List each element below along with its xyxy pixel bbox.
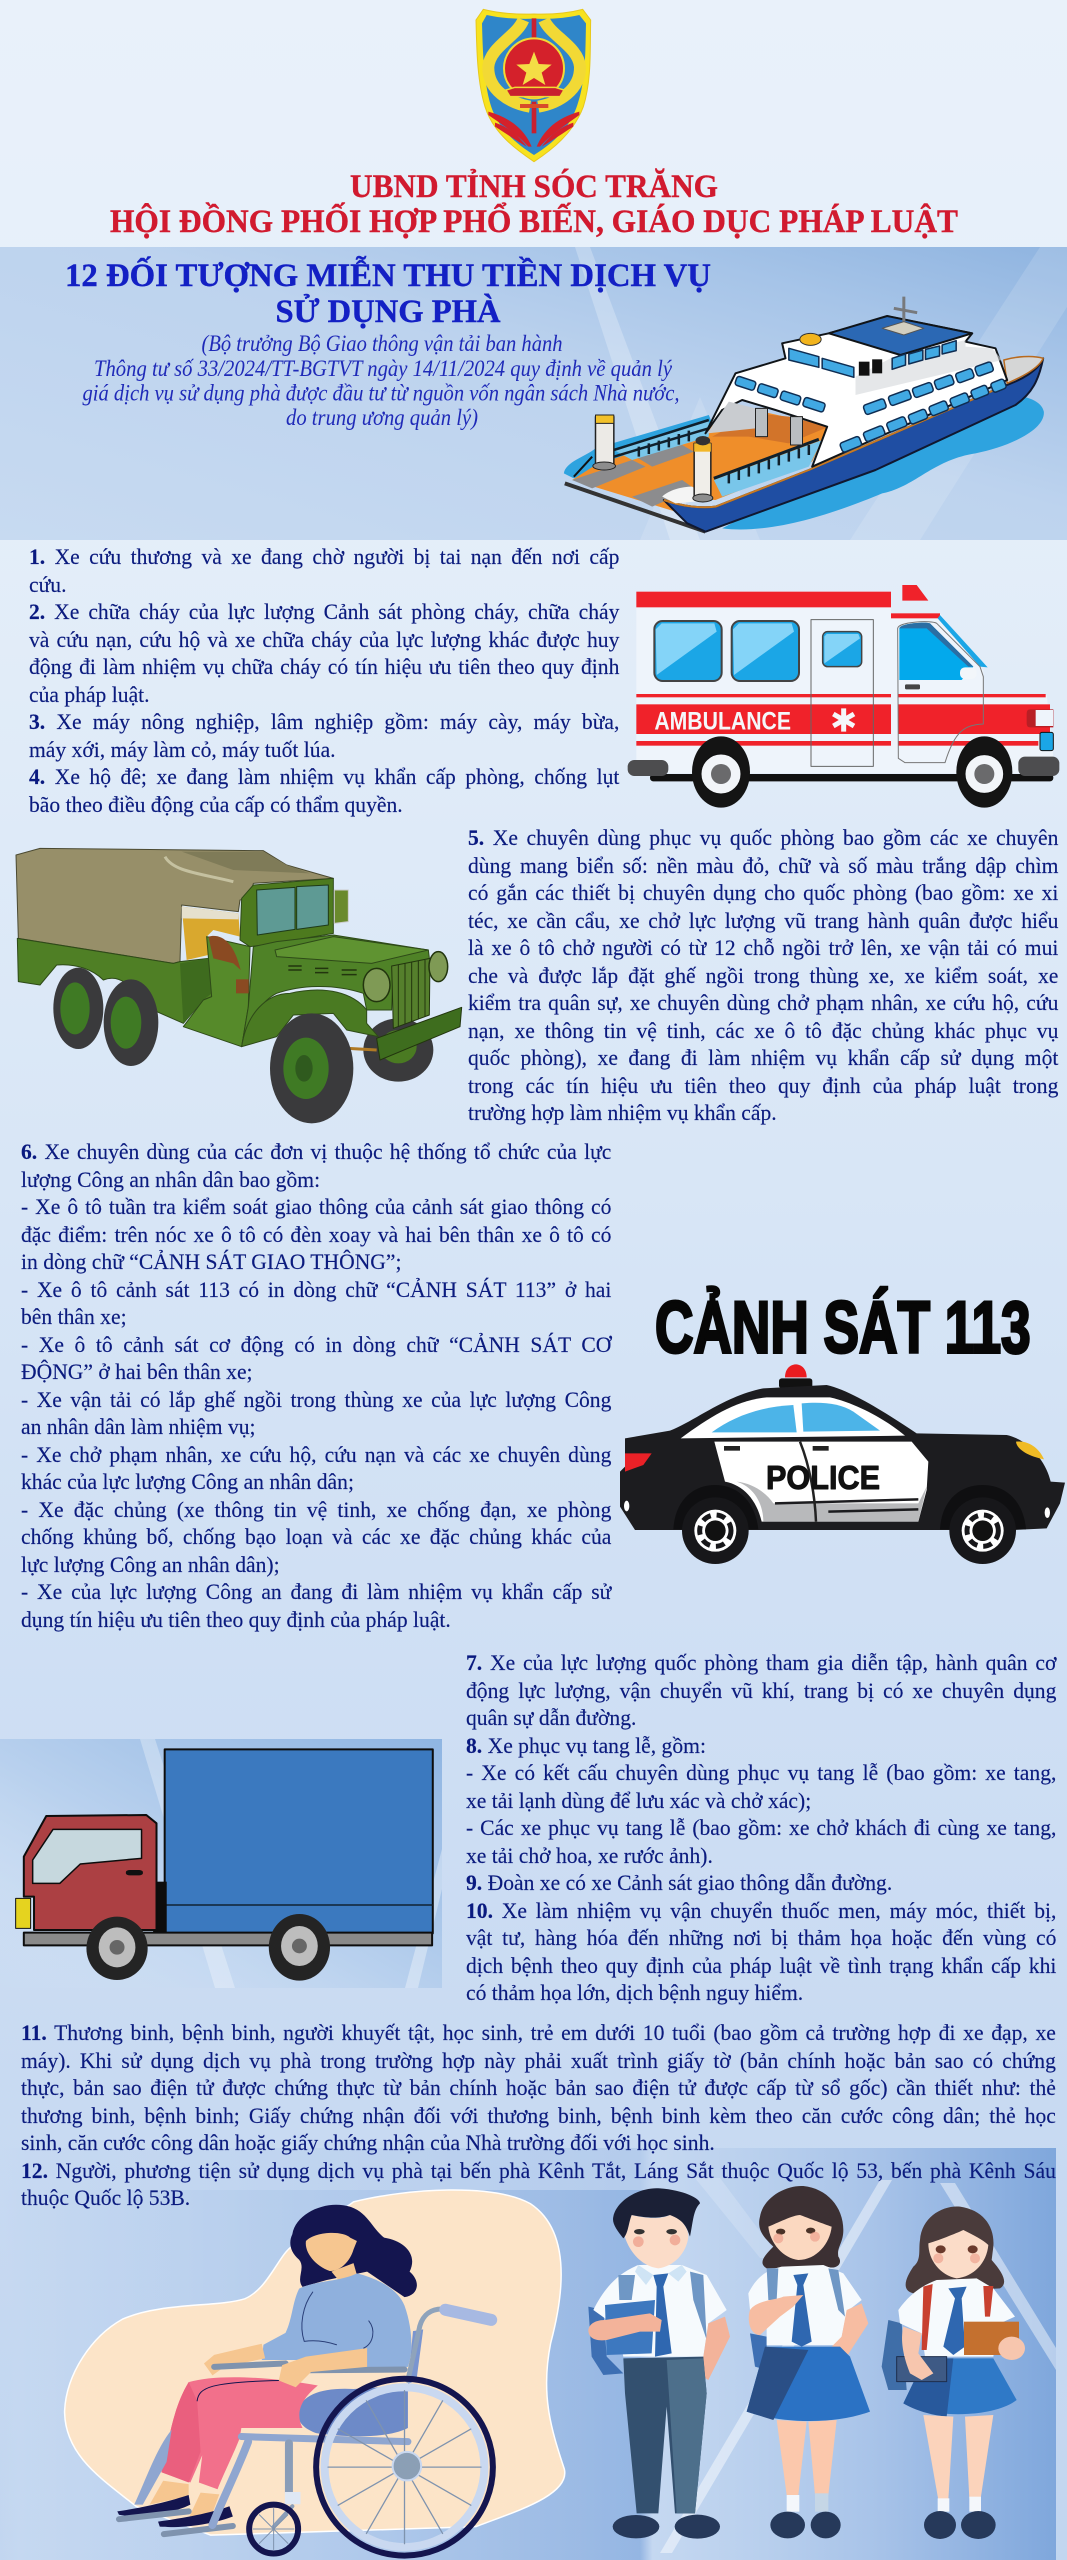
illustration: person in wheelchair: [64, 2189, 566, 2559]
text: items 7 to 10: vật tư, hàng hóa đến những nơi bị thảm họa hoặc đến vùng có: [466, 1925, 1056, 1950]
text: item 6: - Xe ô tô cảnh sát cơ động có in dòng chữ “CẢNH SÁT CƠ: [20, 1332, 611, 1356]
text: item 5: kiểm tra quân sự, xe chuyên dùng chở phạm nhân, xe cứu hộ, cứu: [468, 990, 1058, 1015]
text: items 7 to 10: 9. Đoàn xe có xe Cảnh sát giao thông dẫn đường.: [466, 1870, 892, 1895]
text: items 1 to 4: cứu.: [28, 572, 66, 596]
text: items 7 to 10: 8. Xe phục vụ tang lễ, gồm:: [466, 1732, 706, 1758]
text: items 1 to 4: 4. Xe hộ đê; xe đang làm nhiệm vụ khẩn cấp phòng, chống lụt: [28, 764, 619, 789]
text: item 5: dùng mang biển số: nền màu đỏ, chữ và số màu trắng dập chìm: [468, 852, 1058, 878]
text: item 6: chống khủng bố, chống bạo loạn và các xe đặc chủng khác của: [20, 1524, 611, 1549]
text: items 11 and 12: 11. Thương binh, bệnh binh, người khuyết tật, học sinh, trẻ em dưới 10 tuổi (bao gồm cả trường hợp đi xe đạp, xe: [20, 2020, 1055, 2045]
text: item 6: an nhân dân làm nhiệm vụ;: [20, 1414, 255, 1439]
heading: organisation and title: HỘI ĐỒNG PHỐI HỢP PHỔ BIẾN, GIÁO DỤC PHÁP LUẬT: [110, 201, 958, 240]
text: items 11 and 12: máy). Khi sử dụng dịch vụ phà trong trường hợp này phải xuất trình giấy tờ (bản chính hoặc bản sao có chứng: [20, 2048, 1055, 2072]
text: item 6: - Xe ô tô cảnh sát 113 có in dòng chữ “CẢNH SÁT 113” ở hai: [20, 1276, 611, 1302]
text: items 7 to 10: quân sự dẫn đường.: [466, 1705, 636, 1730]
text: item 5: trong các tín hiệu ưu tiên theo quy định của pháp luật trong: [468, 1072, 1058, 1098]
subtitle: Thông tư số 33/2024/TT-BGTVT ngày 14/11/2024 quy định về quản lý: [94, 356, 672, 382]
student: girl with book: [882, 2207, 1025, 2539]
text: item 6: lực lượng Công an nhân dân);: [20, 1552, 279, 1576]
text: items 7 to 10: động lực lượng, vận chuyển vũ khí, trang bị có xe chuyên dụng: [466, 1678, 1056, 1702]
text: item 5: trường hợp làm nhiệm vụ khẩn cấp.: [468, 1100, 776, 1125]
heading: organisation and title: [65, 167, 958, 330]
text: items 1 to 4: 2. Xe chữa cháy của lực lượng Cảnh sát phòng cháy, chữa cháy: [28, 599, 619, 624]
text: items 11 and 12: [20, 2020, 1056, 2210]
bottom background panel: [134, 2148, 1056, 2560]
text: item 5: nạn, xe thông tin vệ tinh, các xe ô tô đặc chủng khác phục vụ: [468, 1018, 1058, 1042]
icon: ambulance: [628, 585, 1060, 808]
text: item 5: là xe ô tô chở người có từ 12 chỗ ngồi trở lên, xe vận tải có mui: [468, 935, 1058, 960]
subtitle: giá dịch vụ sử dụng phà được đầu tư từ nguồn vốn ngân sách Nhà nước,: [82, 380, 680, 406]
text: item 6: dụng tín hiệu ưu tiên theo quy định của pháp luật.: [20, 1606, 450, 1632]
text: items 7 to 10: - Xe có kết cấu chuyên dùng phục vụ tang lễ (bao gồm: xe tang,: [466, 1760, 1056, 1785]
text: items 11 and 12: thương binh, bệnh binh; Giấy chứng nhận đối với thương binh, bệnh binh kèm theo căn cước công dân; thẻ học: [20, 2102, 1055, 2128]
text: item 6: - Xe của lực lượng Công an đang đi làm nhiệm vụ khẩn cấp sử: [20, 1579, 611, 1604]
text: item 6: - Xe đặc chủng (xe thông tin vệ tinh, xe chống đạn, xe phòng: [20, 1496, 611, 1522]
heading: organisation and title: UBND TỈNH SÓC TRĂNG: [350, 167, 718, 205]
illustration: three students: [588, 2186, 1025, 2539]
truck background panel: [0, 1739, 442, 1988]
icon: police car: POLICE: [766, 1460, 880, 1497]
text: item 6: lượng Công an nhân dân bao gồm:: [20, 1166, 320, 1192]
text: item 6: đặc điểm: trên nóc xe ô tô có đèn xoay và hai bên thân xe ô tô có: [20, 1222, 611, 1246]
text: items 7 to 10: - Các xe phục vụ tang lễ (bao gồm: xe chở khách đi cùng xe tang,: [466, 1815, 1056, 1840]
text: item 5: 5. Xe chuyên dùng phục vụ quốc phòng bao gồm các xe chuyên: [468, 825, 1058, 850]
heading: organisation and title: SỬ DỤNG PHÀ: [276, 292, 501, 330]
text: items 7 to 10: [466, 1650, 1057, 2005]
text: items 11 and 12: thực, bản sao điện tử được chứng thực từ bản chính hoặc bản sao điện tử được cấp từ sổ gốc) cần thiết như: thẻ: [20, 2075, 1055, 2100]
heading: organisation and title: 12 ĐỐI TƯỢNG MIỄN THU TIỀN DỊCH VỤ: [65, 255, 711, 294]
icon: ambulance: AMBULANCE: [654, 707, 791, 735]
text: item 6: khác của lực lượng Công an nhân dân;: [20, 1469, 353, 1494]
student: girl with tie: [747, 2186, 870, 2538]
subtitle: [82, 331, 680, 431]
header blue panel: [0, 247, 1067, 540]
text: items 7 to 10: 7. Xe của lực lượng quốc phòng tham gia diễn tập, hành quân cơ: [466, 1650, 1056, 1675]
student: boy: [588, 2188, 730, 2539]
text: items 7 to 10: dịch bệnh theo quy định của pháp luật về tình trạng khẩn cấp khi: [466, 1952, 1056, 1978]
text: items 7 to 10: có thảm họa lớn, dịch bệnh nguy hiểm.: [466, 1980, 803, 2005]
text: item 6: - Xe vận tải có lắp ghế ngồi trong thùng xe của lực lượng Công: [20, 1386, 611, 1412]
icon: delivery truck: [15, 1748, 434, 1981]
text: item 6: 6. Xe chuyên dùng của các đơn vị thuộc hệ thống tổ chức của lực: [20, 1139, 611, 1164]
text: items 1 to 4: động đi làm nhiệm vụ chữa cháy có tín hiệu ưu tiên theo quy định: [28, 654, 619, 679]
text: items 1 to 4: của pháp luật.: [28, 682, 149, 706]
text: items 1 to 4: [28, 544, 620, 817]
text: item 6: [20, 1139, 612, 1632]
text: item 6: bên thân xe;: [20, 1304, 126, 1329]
text: item 5: che và được lắp đặt ghế ngồi trong thùng xe, xe kiểm soát, xe: [468, 962, 1058, 988]
logo: [476, 8, 592, 162]
text: item 6: ĐỘNG” ở hai bên thân xe;: [20, 1359, 252, 1384]
icon: ferry: [564, 296, 1044, 534]
text: item 6: - Xe ô tô tuần tra kiểm soát giao thông của cảnh sát giao thông có: [20, 1194, 611, 1219]
text: items 1 to 4: 3. Xe máy nông nghiệp, lâm nghiệp gồm: máy cày, máy bừa,: [28, 709, 619, 734]
text: items 11 and 12: thuộc Quốc lộ 53B.: [20, 2185, 190, 2210]
text: items 1 to 4: máy xới, máy làm cỏ, máy tuốt lúa.: [28, 736, 335, 762]
text: items 1 to 4: và cứu nạn, cứu hộ và xe chữa cháy của lực lượng khác được huy: [28, 626, 619, 652]
text: item 5: quốc phòng), xe đang đi làm nhiệm vụ khẩn cấp sử dụng một: [468, 1045, 1058, 1070]
subtitle: (Bộ trưởng Bộ Giao thông vận tải ban hành: [202, 331, 562, 357]
icon: police car: [620, 1364, 1065, 1564]
text: items 11 and 12: sinh, căn cước công dân hoặc giấy chứng nhận của Nhà trường đối với học sinh.: [20, 2130, 714, 2155]
text: items 1 to 4: 1. Xe cứu thương và xe đang chờ người bị tai nạn đến nơi cấp: [28, 544, 619, 569]
text: items 7 to 10: 10. Xe làm nhiệm vụ vận chuyển thuốc men, máy móc, thiết bị,: [466, 1898, 1056, 1922]
text: items 7 to 10: xe tải chở hoa, xe rước ảnh).: [466, 1842, 713, 1868]
subtitle: do trung ương quản lý): [286, 405, 478, 431]
text: item 6: in dòng chữ “CẢNH SÁT GIAO THÔNG”;: [20, 1249, 401, 1274]
text: item 5: téc, xe cần cẩu, xe chở lực lượng vũ trang hành quân được hiểu: [468, 908, 1058, 932]
text: items 7 to 10: xe tải lạnh dùng để lưu xác và chở xác);: [466, 1788, 811, 1812]
text: items 11 and 12: 12. Người, phương tiện sử dụng dịch vụ phà tại bến phà Kênh Tắt, Láng Sắt thuộc Quốc lộ 53, bến phà Kênh Sáu: [20, 2158, 1055, 2182]
text: item 5: [468, 825, 1058, 1125]
text: item 6: - Xe chở phạm nhân, xe cứu hộ, cứu nạn và các xe chuyên dùng: [20, 1442, 611, 1466]
text: items 1 to 4: bão theo điều động của cấp có thẩm quyền.: [28, 792, 402, 816]
text: item 5: có gắn các thiết bị chuyên dụng cho quốc phòng (bao gồm: xe xi: [468, 880, 1058, 905]
icon: military truck: [16, 848, 462, 1124]
